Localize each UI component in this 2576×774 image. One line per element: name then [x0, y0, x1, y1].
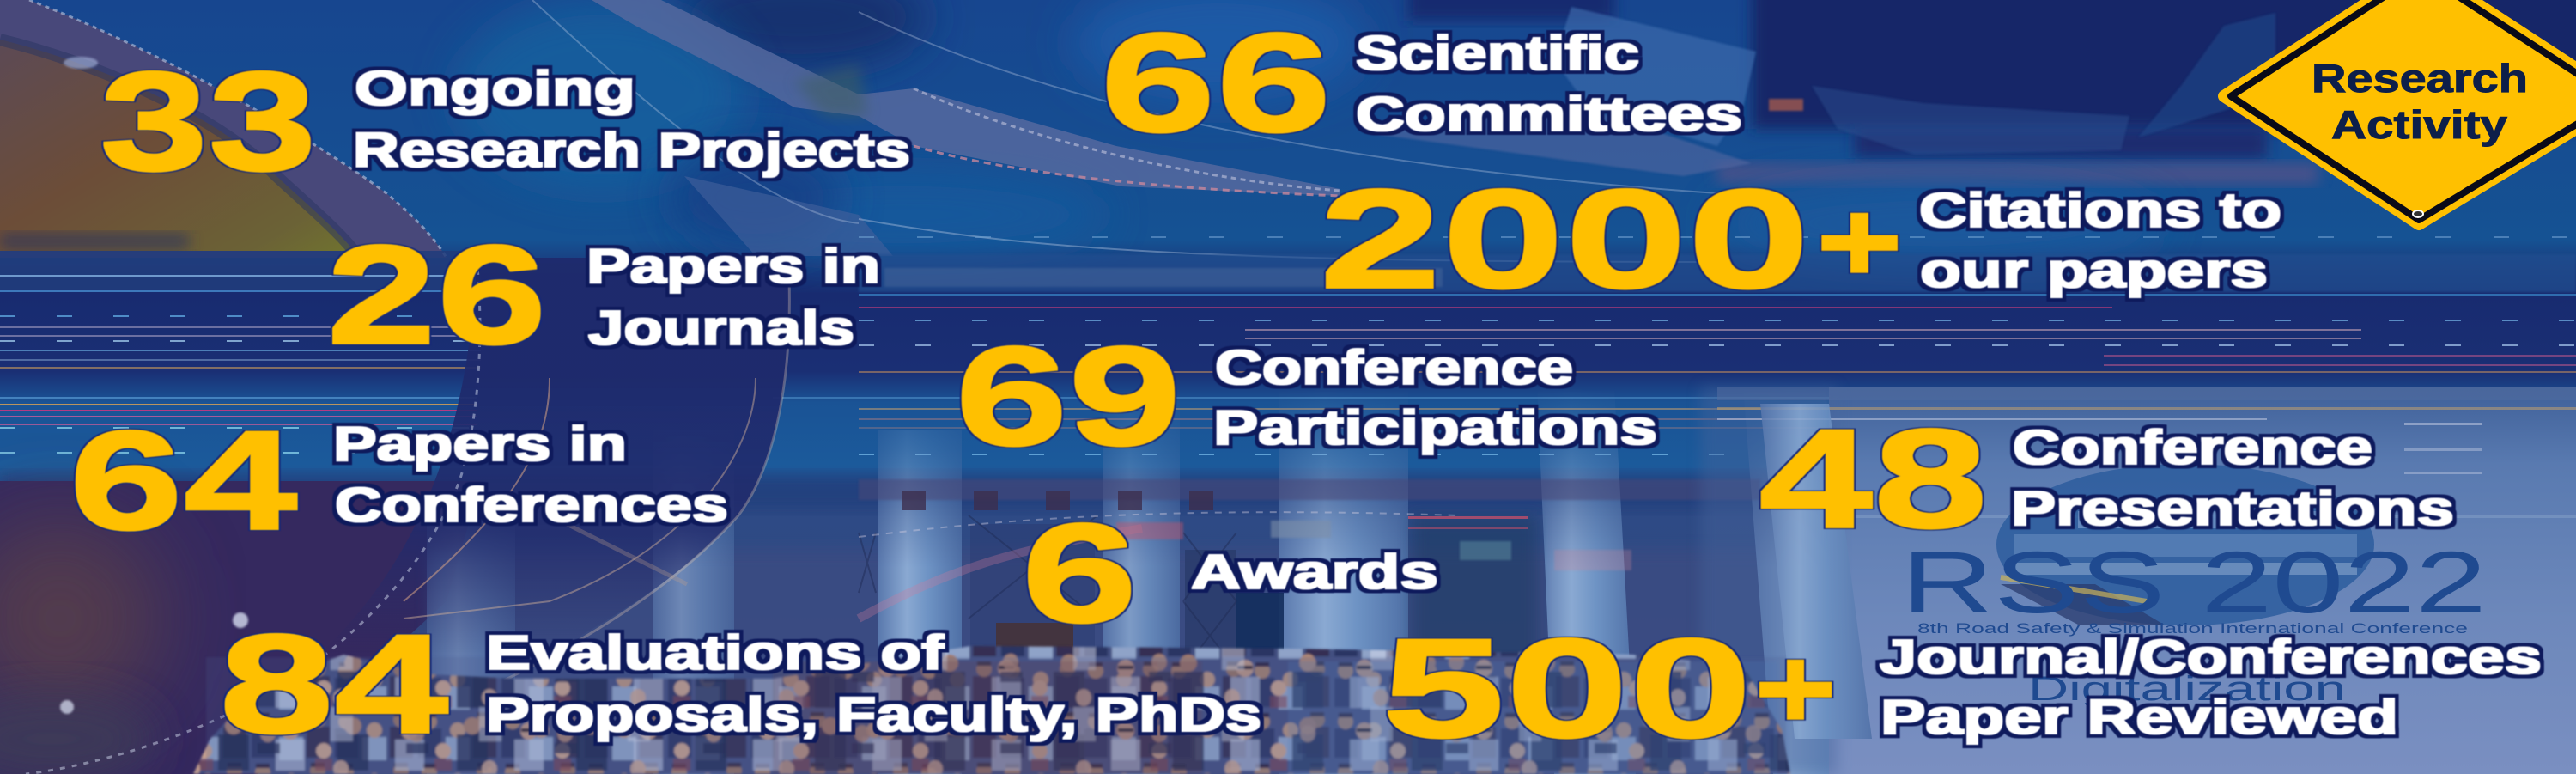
label: Conference — [2013, 420, 2372, 475]
label — [486, 625, 1261, 742]
label — [1880, 630, 2542, 745]
label — [353, 61, 910, 178]
stat: 500+ papers reviewed — [1382, 611, 2542, 766]
label: Conferences — [335, 478, 728, 533]
label: Research Projects — [353, 123, 910, 178]
soft tonal areas of the aerial road — [455, 0, 2576, 266]
label: Citations to — [1919, 183, 2281, 238]
crowd of conference attendees — [193, 646, 1790, 774]
number: + — [1816, 179, 1903, 304]
label — [1919, 183, 2281, 298]
label: Journal/Conferences — [1880, 630, 2542, 685]
stat: 2000+ citations — [1319, 162, 2281, 317]
label: Scientific — [1356, 26, 1639, 81]
number: 69 — [955, 319, 1182, 474]
label: Proposals, Faculty, PhDs — [486, 687, 1261, 742]
label — [1356, 26, 1742, 142]
label: our papers — [1920, 243, 2268, 298]
number: 26 — [326, 217, 547, 373]
stat: 64 papers in conferences — [69, 403, 728, 558]
stat: 48 conference presentations — [1759, 401, 2454, 557]
number: 64 — [69, 403, 298, 558]
road sign: research activity — [2224, 0, 2576, 224]
sign black border — [2231, 0, 2576, 220]
logo title: RSS 2022: RSS 2022 — [1901, 533, 2487, 631]
label: Papers in — [333, 417, 627, 472]
sign text: Activity — [2331, 102, 2508, 147]
building roofs — [1554, 7, 2275, 155]
stat: 33 ongoing research projects — [100, 44, 910, 199]
label: Papers in — [586, 239, 880, 294]
label: Participations — [1213, 400, 1657, 455]
truss towers — [859, 515, 1236, 670]
label — [586, 239, 880, 356]
sign text: Research — [2312, 56, 2528, 101]
label: Paper Reviewed — [1880, 690, 2398, 745]
label — [2011, 420, 2454, 536]
stat: 84 evaluations — [219, 606, 1261, 762]
purple-brown night scene and columns — [0, 475, 1820, 774]
brown lawn roundabout — [0, 0, 447, 258]
motion streaks between columns — [859, 512, 1631, 619]
label: Evaluations of — [486, 625, 945, 680]
label: Awards — [1191, 545, 1438, 600]
curved dark road — [26, 258, 789, 774]
label — [333, 417, 728, 533]
number: 66 — [1100, 5, 1332, 161]
number — [1319, 162, 1903, 317]
stat: 66 scientific committees — [1100, 5, 1742, 161]
stat: 69 conference participations — [955, 319, 1657, 474]
number: 84 — [219, 606, 449, 762]
number — [1382, 611, 1837, 766]
label: Journals — [588, 301, 854, 356]
building columns — [427, 387, 1880, 774]
conference logo text — [1901, 533, 2487, 708]
label: Presentations — [2011, 481, 2454, 536]
label — [1213, 340, 1657, 455]
sign text — [2312, 56, 2528, 147]
label: Ongoing — [355, 61, 635, 116]
number: 48 — [1759, 401, 1988, 557]
number: 6 — [1021, 496, 1138, 651]
stat: 6 awards — [1021, 496, 1438, 651]
number: 33 — [100, 44, 317, 199]
logo subtitle: 8th Road Safety & Simulation International Conference — [1917, 620, 2468, 637]
label: Committees — [1356, 87, 1742, 142]
stat: 26 papers in journals — [326, 217, 880, 373]
gaps between columns — [859, 479, 1760, 670]
horizontal highway lines — [0, 237, 2576, 454]
sign bolt — [2413, 210, 2423, 217]
sign outer diamond — [2224, 0, 2576, 224]
label: Conference — [1215, 340, 1573, 395]
logo theme word: Digitalization — [2028, 670, 2346, 708]
number: + — [1754, 625, 1837, 751]
number: 2000 — [1319, 162, 1810, 317]
lavender road medians — [532, 0, 1752, 262]
number: 500 — [1382, 611, 1753, 766]
RSS globe emblem — [1996, 464, 2374, 625]
road stage lamps — [902, 491, 1213, 510]
light right-hand haze panel — [1700, 387, 2576, 774]
